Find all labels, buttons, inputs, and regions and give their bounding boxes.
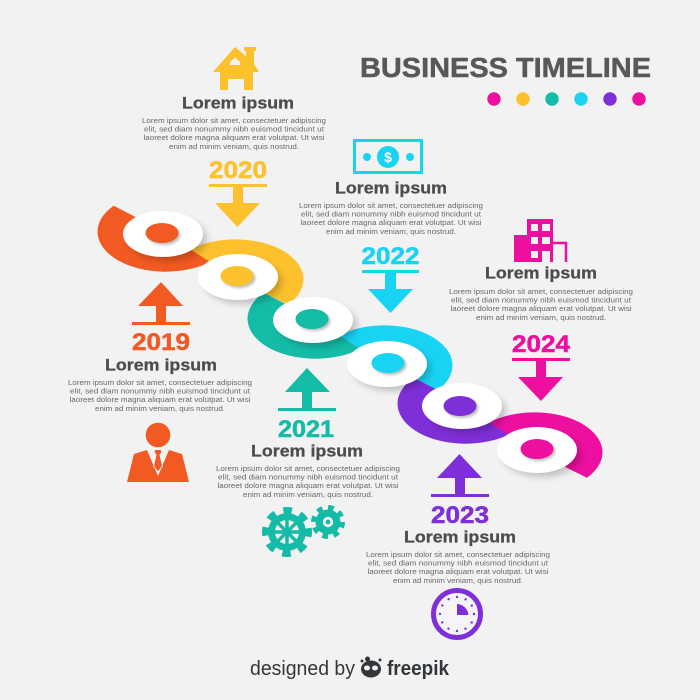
body text bbox=[216, 464, 400, 499]
icon: clock bbox=[434, 590, 480, 638]
panel: 2019 bbox=[68, 282, 252, 482]
body text: Lorem ipsum dolor sit amet, consectetuer adipiscing bbox=[142, 116, 326, 125]
body text: Lorem ipsum dolor sit amet, consectetuer adipiscing bbox=[299, 201, 483, 210]
ring segment 2024 bbox=[490, 412, 602, 478]
panel: 2021 bbox=[216, 368, 400, 557]
winding timeline ribbon bbox=[98, 206, 602, 478]
ring segment 2019 bbox=[98, 206, 210, 272]
body text: elit, sed diam nonummy nibh euismod tincidunt ut bbox=[301, 210, 482, 219]
year: 2024 bbox=[512, 331, 571, 358]
ring segment 2020 bbox=[190, 239, 303, 305]
icon: banknote bbox=[354, 140, 422, 172]
arrow: up bbox=[132, 282, 190, 325]
heading: Lorem ipsum bbox=[251, 442, 363, 460]
body text: elit, sed diam nonummy nibh euismod tincidunt ut bbox=[144, 125, 325, 134]
body text: enim ad minim veniam, quis nostrud. bbox=[326, 227, 456, 236]
heading: Lorem ipsum bbox=[485, 264, 597, 282]
ring segment 2023 bbox=[398, 378, 510, 444]
body text: enim ad minim veniam, quis nostrud. bbox=[95, 404, 225, 413]
body text: laoreet dolore magna aliquam erat volutpat. Ut wisi bbox=[218, 481, 399, 490]
ring segment 2022 bbox=[340, 325, 452, 391]
credit: designed by freepik bbox=[250, 656, 450, 680]
body text bbox=[299, 201, 483, 236]
body text: enim ad minim veniam, quis nostrud. bbox=[243, 490, 373, 499]
panel: 2022 bbox=[299, 140, 483, 313]
body text: Lorem ipsum dolor sit amet, consectetuer adipiscing bbox=[68, 378, 252, 387]
body text: elit, sed diam nonummy nibh euismod tincidunt ut bbox=[451, 296, 632, 305]
credit text: designed by bbox=[250, 658, 355, 680]
icon: freepik bug bbox=[360, 656, 382, 678]
year: 2023 bbox=[431, 502, 489, 529]
arrow: up bbox=[278, 368, 336, 411]
centre dots bbox=[146, 223, 554, 459]
body text: laoreet dolore magna aliquam erat volutpat. Ut wisi bbox=[70, 395, 251, 404]
disc shadows bbox=[129, 217, 581, 477]
heading: Lorem ipsum bbox=[335, 178, 447, 198]
title: BUSINESS TIMELINE bbox=[360, 52, 651, 83]
year: 2020 bbox=[209, 157, 267, 184]
panel: 2020 bbox=[142, 47, 326, 227]
arrow: down bbox=[512, 358, 570, 401]
freepik wordmark: freepik bbox=[387, 658, 450, 680]
year: 2022 bbox=[362, 243, 420, 270]
body text bbox=[68, 378, 252, 413]
body text bbox=[366, 550, 550, 585]
body text: laoreet dolore magna aliquam erat volutpat. Ut wisi bbox=[144, 133, 325, 142]
ring segment 2021 bbox=[248, 293, 360, 359]
body text: elit, sed diam nonummy nibh euismod tincidunt ut bbox=[218, 473, 399, 482]
panel: 2024 bbox=[449, 219, 633, 401]
body text: elit, sed diam nonummy nibh euismod tincidunt ut bbox=[70, 387, 251, 396]
arrow: down bbox=[209, 184, 267, 227]
heading: Lorem ipsum bbox=[404, 528, 516, 546]
body text: Lorem ipsum dolor sit amet, consectetuer adipiscing bbox=[216, 464, 400, 473]
arrow: up bbox=[431, 454, 489, 497]
body text: enim ad minim veniam, quis nostrud. bbox=[393, 576, 523, 585]
body text bbox=[449, 287, 633, 322]
icon: gears bbox=[262, 507, 342, 557]
heading: Lorem ipsum bbox=[105, 356, 217, 374]
body text: enim ad minim veniam, quis nostrud. bbox=[476, 313, 606, 322]
white discs bbox=[123, 211, 577, 473]
centre dot shadows bbox=[148, 225, 556, 461]
icon: house bbox=[213, 47, 259, 90]
body text: laoreet dolore magna aliquam erat volutpat. Ut wisi bbox=[368, 567, 549, 576]
body text: laoreet dolore magna aliquam erat volutpat. Ut wisi bbox=[450, 304, 632, 313]
body text bbox=[142, 116, 326, 151]
panel: 2023 bbox=[366, 454, 550, 638]
year: 2019 bbox=[132, 329, 190, 356]
body text: laoreet dolore magna aliquam erat volutpat. Ut wisi bbox=[300, 218, 482, 227]
heading: Lorem ipsum bbox=[182, 94, 294, 112]
body text: Lorem ipsum dolor sit amet, consectetuer adipiscing bbox=[366, 550, 550, 559]
colour legend dots bbox=[487, 92, 646, 106]
icon: banknote: $ bbox=[384, 149, 392, 165]
arrow: down bbox=[362, 270, 419, 313]
year: 2021 bbox=[278, 416, 334, 443]
icon: businessperson bbox=[127, 423, 189, 482]
icon: buildings bbox=[514, 219, 566, 262]
body text: enim ad minim veniam, quis nostrud. bbox=[169, 142, 299, 151]
body text: elit, sed diam nonummy nibh euismod tincidunt ut bbox=[368, 559, 549, 568]
body text: Lorem ipsum dolor sit amet, consectetuer adipiscing bbox=[449, 287, 633, 296]
